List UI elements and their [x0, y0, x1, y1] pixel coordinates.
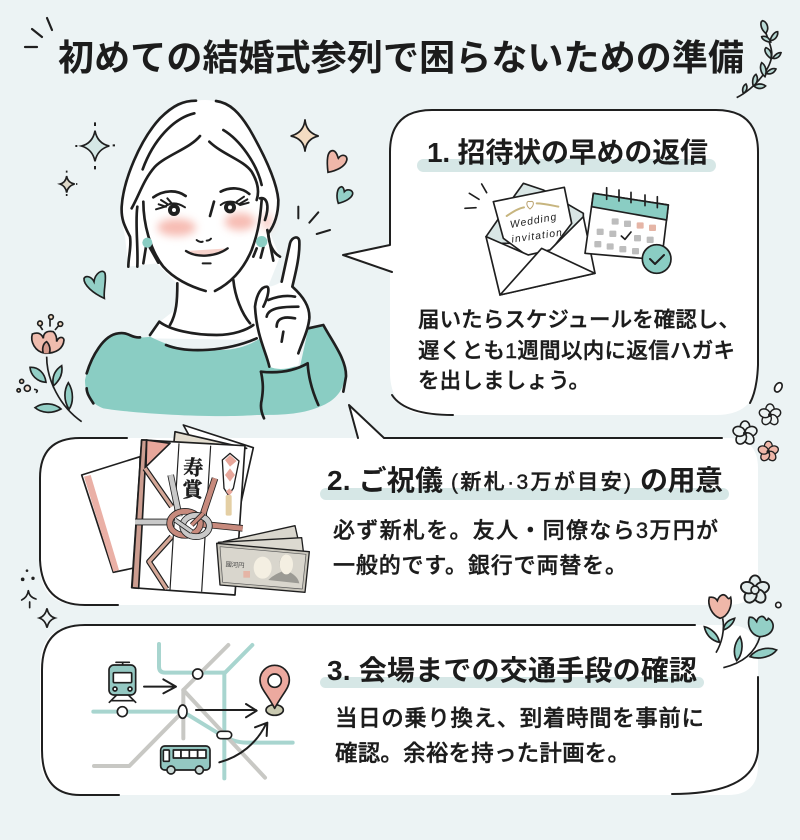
- icon: train: [109, 662, 136, 702]
- step 1 body text: 届いたらスケジュールを確認し、: [418, 308, 740, 332]
- step 1 body text: [418, 308, 740, 393]
- mizuhiki cords: [171, 475, 179, 517]
- stations: [117, 669, 232, 739]
- sleeve cuff: [261, 363, 318, 418]
- hair lines: [87, 101, 346, 403]
- illustration: woman pointing: [85, 100, 346, 418]
- icon: calendar with check: [585, 188, 671, 273]
- blush: [157, 213, 271, 236]
- step 3 body text: 当日の乗り換え、到着時間を事前に: [335, 706, 704, 731]
- step 1 body text: 遅くとも1週間以内に返信ハガキ: [418, 339, 735, 363]
- sweater: [85, 325, 345, 416]
- hair and face: [122, 100, 280, 340]
- panel: step 2 background: [40, 405, 758, 605]
- step 3 body text: [335, 706, 704, 766]
- step 1 heading: 1. 招待状の早めの返信: [427, 137, 708, 168]
- step 2 heading: (新札·3万が目安): [451, 471, 631, 494]
- icon: wedding invitation envelope: Wedding: [509, 212, 557, 231]
- illustration: shugi-bukuro envelope and bills: 賞: [183, 478, 206, 501]
- noshi: [222, 453, 239, 495]
- icon: wedding invitation envelope: [465, 183, 595, 295]
- illustration: shugi-bukuro envelope and bills: 寿: [183, 456, 203, 479]
- title: 初めての結婚式参列で困らないための準備: [58, 37, 744, 78]
- eyes: [156, 197, 249, 216]
- icon: wedding invitation envelope: invitation: [511, 228, 563, 246]
- bills: [223, 526, 299, 552]
- step 2 body text: 必ず新札を。友人・同僚なら3万円が: [333, 518, 718, 543]
- icon: bus: [161, 746, 210, 774]
- step 2 body text: 一般的です。銀行で両替を。: [333, 553, 627, 578]
- mouth: [186, 248, 228, 256]
- pointing hand: [255, 237, 309, 369]
- step 3 heading: 3. 会場までの交通手段の確認: [327, 655, 697, 686]
- map lines: [93, 644, 293, 778]
- panel: step 1 background: [343, 110, 758, 415]
- flowers at panel 3 corner: [704, 575, 781, 668]
- icon: location pin: [260, 665, 289, 715]
- illustration: shugi-bukuro envelope and bills: [82, 425, 309, 595]
- arrows: [144, 679, 267, 762]
- step 3 body text: 確認。余裕を持った計画を。: [335, 741, 630, 766]
- decorative rays top left: [25, 18, 52, 47]
- step 2 heading: 2. ご祝儀: [327, 464, 443, 496]
- illustration: shugi-bukuro envelope and bills: 國河円: [225, 560, 245, 570]
- back folder: [82, 457, 140, 572]
- flowers between panels 1 and 2: [732, 381, 784, 462]
- panel: step 3 background: [40, 625, 758, 795]
- step 1 body text: を出しましょう。: [418, 369, 590, 393]
- step 2 heading: [320, 464, 729, 500]
- step 2 body text: [333, 518, 718, 578]
- icon: flower left: [17, 315, 82, 422]
- pointing rays: [298, 207, 330, 234]
- sparkles bottom left: [22, 570, 55, 628]
- icon: laurel branch: [737, 21, 781, 98]
- illustration: transit map: [93, 644, 293, 778]
- earrings: [142, 236, 267, 248]
- sparkles and hearts around the woman: [60, 119, 353, 298]
- main envelope: [132, 440, 245, 595]
- step 2 heading: の用意: [640, 465, 723, 496]
